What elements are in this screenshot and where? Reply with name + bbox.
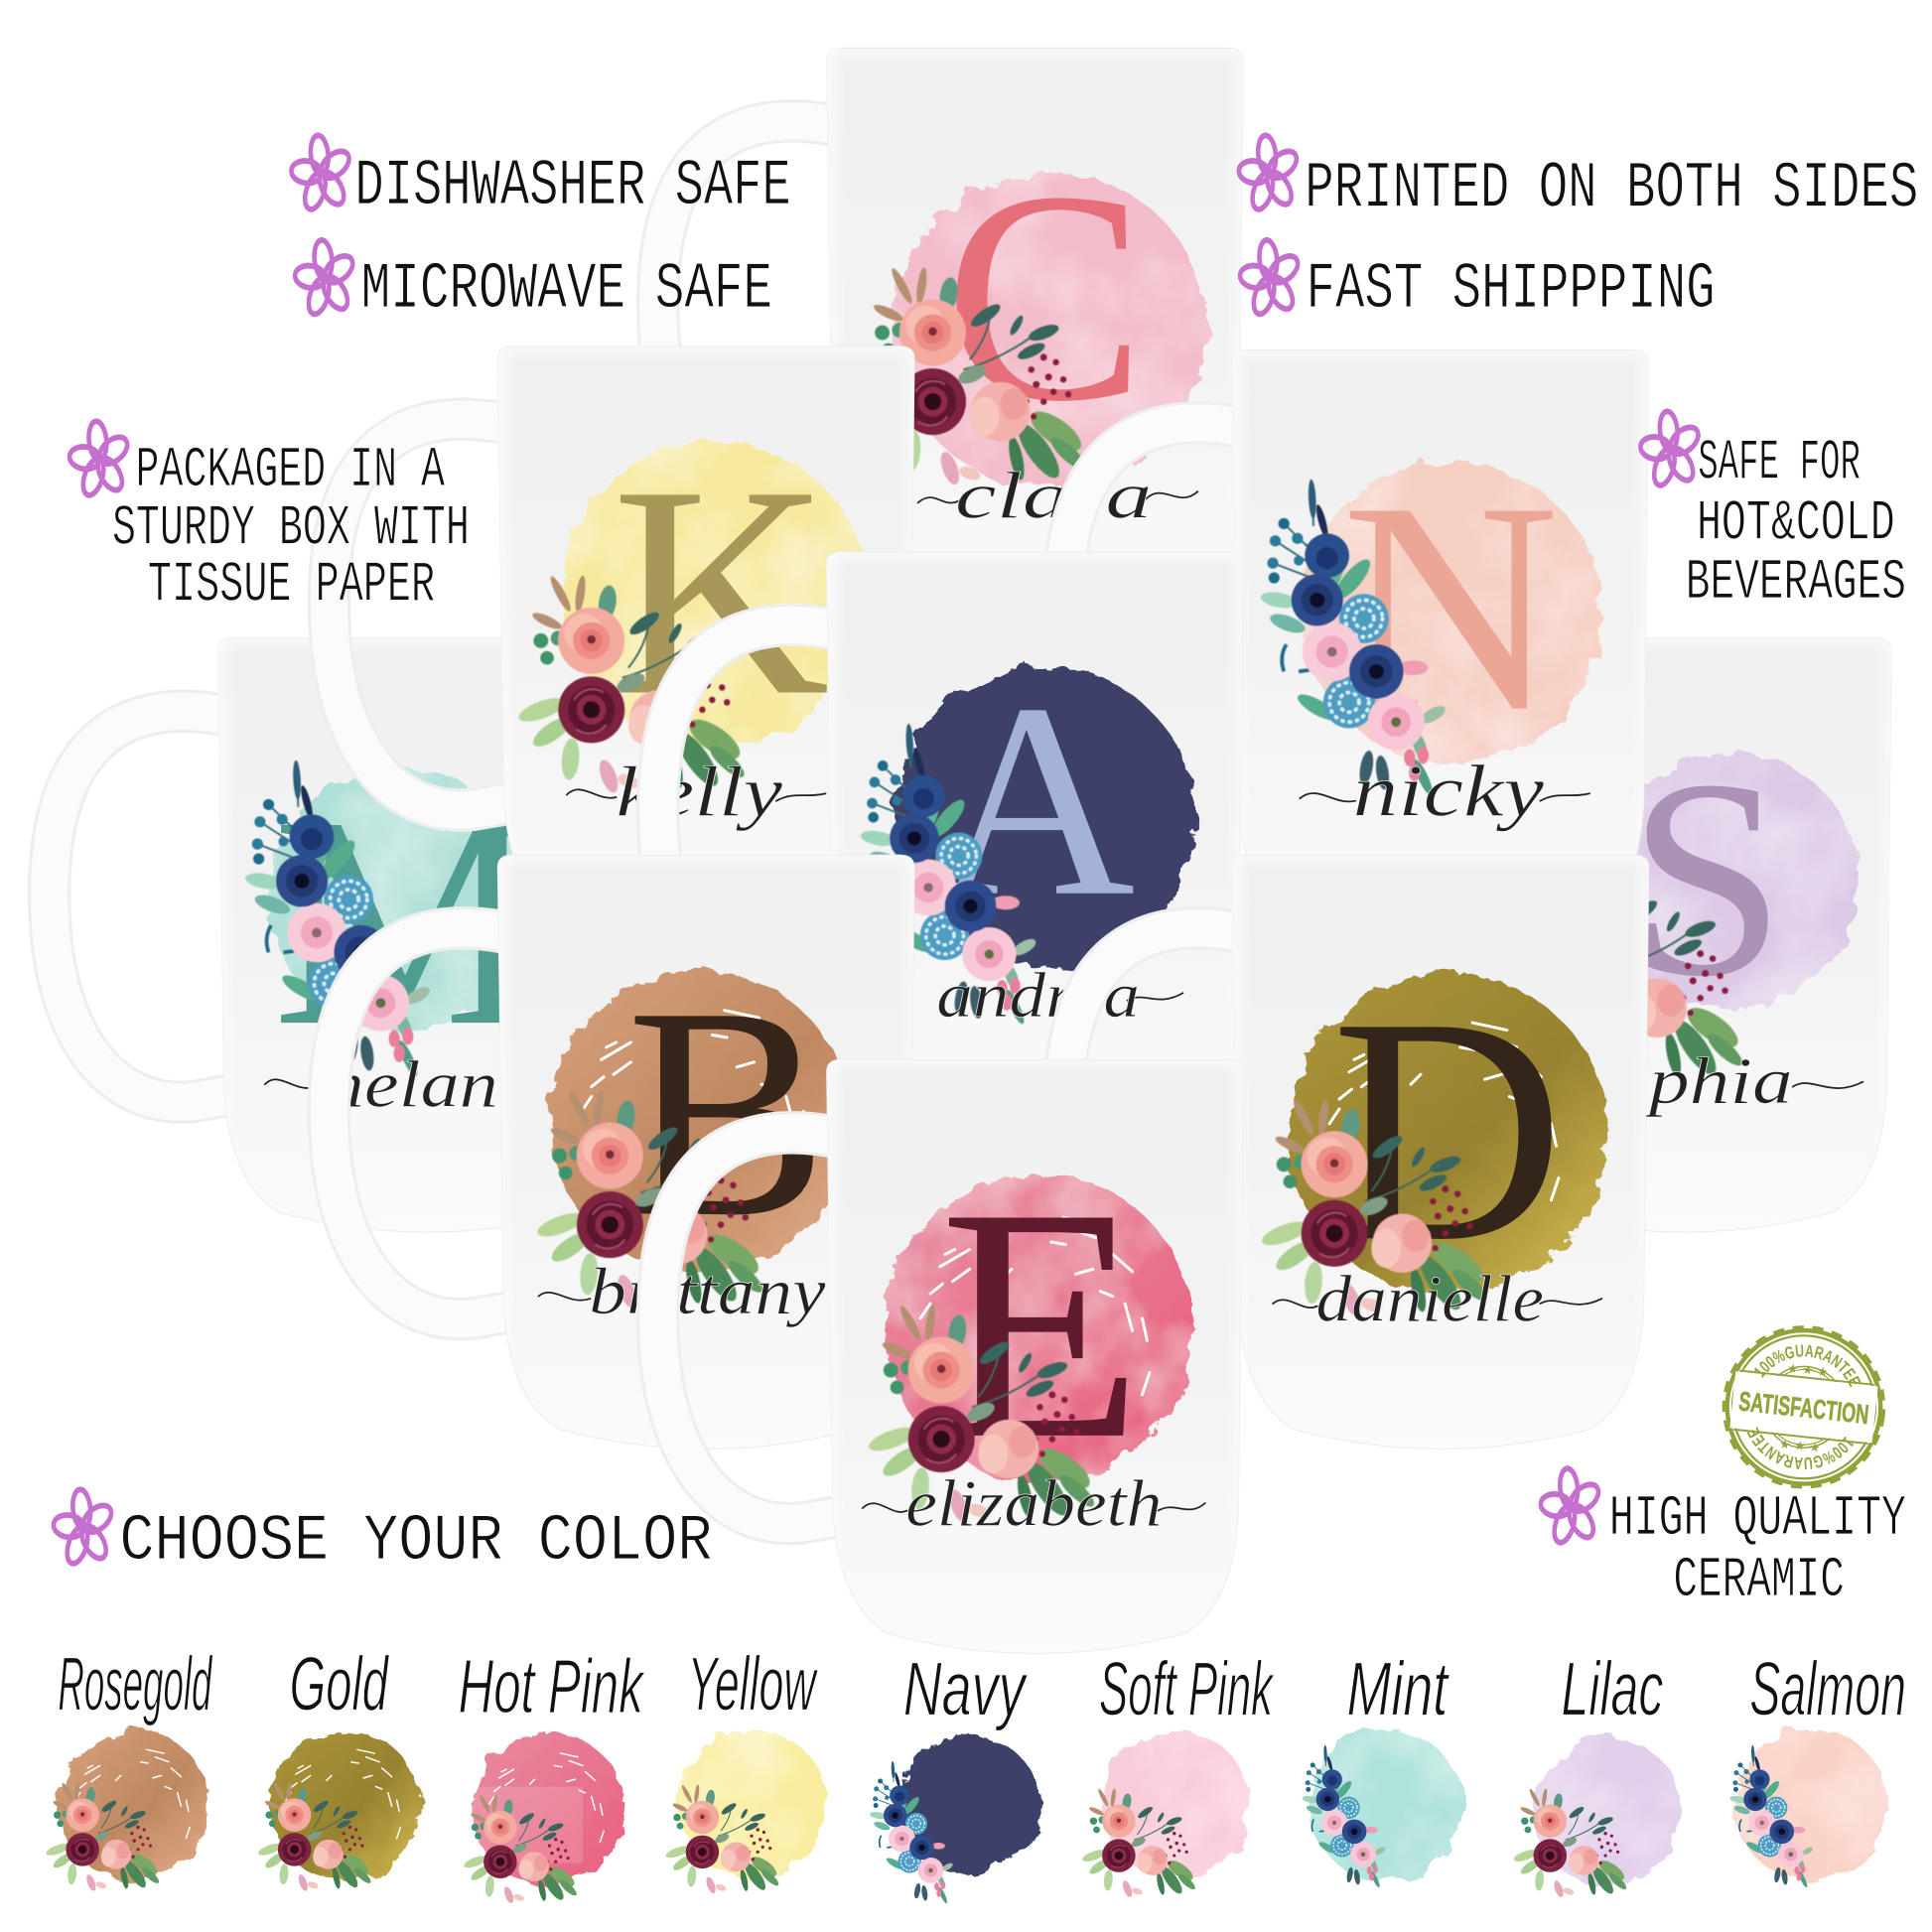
feature: high quality ceramic (1540, 1467, 1906, 1613)
bouquet (1259, 1098, 1491, 1318)
bouquet (244, 760, 433, 1078)
satisfaction stamp: 100%GUARANTEE (1754, 1344, 1861, 1388)
feature: fast shipping: FAST SHIPPPING (1307, 252, 1716, 327)
letter A: A (935, 647, 1135, 954)
feature: dishwasher safe: DISHWASHER SAFE (354, 149, 791, 223)
watercolor circle navy (894, 666, 1194, 967)
satisfaction stamp: 100%GUARANTEE (1747, 1427, 1854, 1469)
mug: letter K kelly (329, 346, 914, 940)
mug: letter N nicky (1063, 349, 1649, 944)
bouquet (866, 1304, 1098, 1524)
scratches (1329, 1023, 1559, 1200)
name nicky: nicky (1353, 752, 1545, 833)
swatch: Yellow: Yellow (688, 1642, 818, 1727)
name clara: clara (955, 459, 1152, 532)
mug: letter E elizabeth (658, 1059, 1243, 1654)
heading: choose your color (53, 1488, 712, 1579)
watercolor circle mint (270, 768, 531, 1031)
mug: letter M melanie (50, 638, 634, 1232)
name kelly: kelly (617, 753, 782, 832)
feature: dishwasher safe (291, 134, 791, 223)
name kelly (567, 753, 826, 832)
satisfaction stamp: ★ ★ ★ (1779, 1436, 1821, 1455)
swatch: Rosegold (45, 1642, 213, 1892)
feature: high quality ceramic: CERAMIC (1673, 1549, 1845, 1613)
letter E: E (939, 1140, 1143, 1508)
swatch: Lilac (1512, 1647, 1682, 1898)
name clara (918, 459, 1197, 532)
satisfaction stamp: ★ ★ ★ (1787, 1360, 1829, 1379)
swatch: Gold (257, 1642, 420, 1892)
mug: letter B brittany (329, 855, 914, 1449)
name danielle (1273, 1262, 1601, 1335)
swatch: Salmon (1729, 1647, 1906, 1888)
letter N: N (1341, 440, 1560, 774)
bouquet (858, 266, 1090, 486)
feature: microwave safe: MICROWAVE SAFE (361, 252, 772, 327)
satisfaction stamp (1722, 1325, 1886, 1489)
feature: safe for hot and cold (1640, 410, 1906, 616)
swatch: Navy (870, 1647, 1039, 1904)
watercolor circle pink (893, 173, 1207, 487)
watercolor circle gold (1288, 973, 1608, 1294)
mug: letter D danielle (1063, 855, 1649, 1449)
bouquet (860, 724, 1038, 1026)
name sophia (1578, 1044, 1863, 1118)
satisfaction stamp: SATISFACTION (1737, 1385, 1870, 1430)
text: Rosegold (58, 1642, 213, 1727)
feature: packaged in a sturdy box: STURDY BOX WITH (112, 496, 470, 561)
name nicky (1300, 752, 1589, 833)
feature: packaged in a sturdy box: TISSUE PAPER (148, 553, 435, 618)
heading: choose your color: CHOOSE YOUR COLOR (119, 1504, 712, 1579)
bouquet (1260, 480, 1448, 797)
watercolor circle salmon (1302, 462, 1601, 762)
swatch: Soft Pink: Soft Pink (1099, 1647, 1275, 1732)
swatch: Navy: Navy (903, 1647, 1029, 1732)
letter M: M (272, 754, 541, 1088)
feature: microwave safe (294, 238, 772, 327)
letter C: C (944, 129, 1146, 464)
name andrea: andrea (936, 959, 1140, 1031)
name sophia: sophia (1578, 1044, 1793, 1118)
name elizabeth: elizabeth (905, 1466, 1162, 1540)
letter D: D (1331, 951, 1565, 1309)
swatch: Hot Pink (459, 1644, 645, 1904)
letter S: S (1628, 721, 1785, 1035)
swatch: Mint: Mint (1346, 1647, 1450, 1732)
name brittany: brittany (589, 1255, 826, 1328)
letter K: K (612, 423, 830, 758)
bouquet (534, 1089, 766, 1311)
mug: letter C clara (658, 48, 1243, 642)
watercolor circle hot pink (885, 1174, 1192, 1482)
swatch: Soft Pink (1081, 1647, 1275, 1898)
scratches (920, 1217, 1150, 1395)
swatch: Hot Pink: Hot Pink (459, 1644, 645, 1729)
watercolor circle lilac (1603, 753, 1860, 1009)
scratches (582, 1011, 811, 1187)
bouquet (516, 575, 749, 795)
swatch: Lilac: Lilac (1561, 1647, 1663, 1732)
watercolor circle yellow (562, 441, 868, 747)
feature: packaged in a sturdy box (69, 420, 470, 618)
swatch: Mint (1302, 1647, 1462, 1888)
swatch: Yellow (664, 1642, 828, 1894)
feature: packaged in a sturdy box: PACKAGED IN A (136, 439, 446, 503)
letter B: B (626, 944, 828, 1279)
mug: letter S sophia (1307, 638, 1891, 1232)
bouquet (1514, 863, 1746, 1083)
mug: letter A andrea (658, 552, 1243, 1146)
feature: fast shipping (1239, 238, 1716, 327)
name melanie: melanie (308, 1047, 554, 1121)
name danielle: danielle (1315, 1262, 1544, 1335)
watercolor circle rosegold (550, 971, 850, 1272)
swatch: Gold: Gold (290, 1642, 389, 1727)
